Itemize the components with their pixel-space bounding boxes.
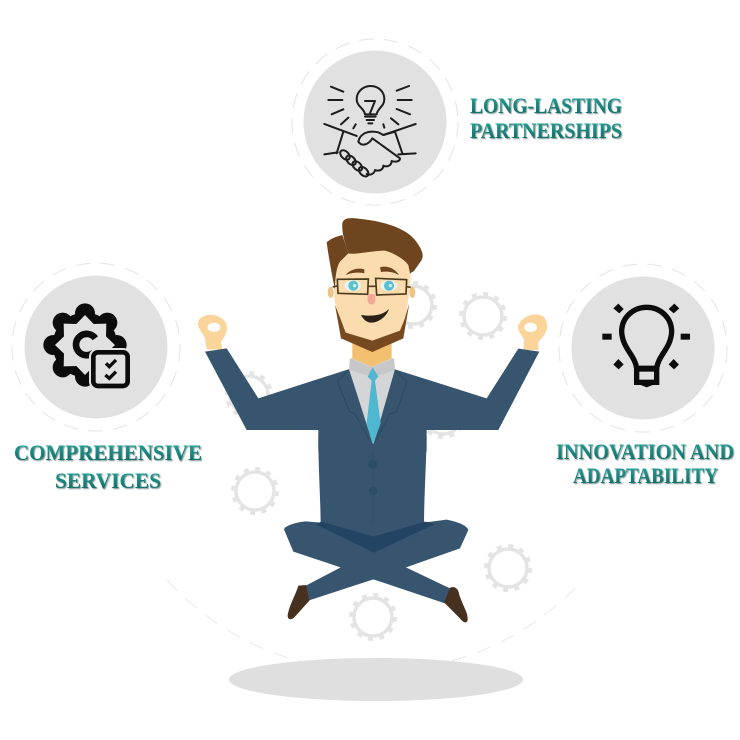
illustration: meditating businessman <box>198 218 547 622</box>
panel: comprehensive services <box>12 263 202 493</box>
heading: long-lasting partnerships <box>470 93 622 143</box>
large dashed orbit <box>167 580 583 672</box>
heading: comprehensive services <box>14 440 202 493</box>
icon: handshake with light bulb <box>324 86 416 178</box>
heading: long-lasting partnerships: PARTNERSHIPS <box>470 118 622 143</box>
floor shadow <box>229 658 523 701</box>
icon: gear with checklist <box>43 303 130 388</box>
heading: comprehensive services: COMPREHENSIVE <box>14 440 202 465</box>
lower body <box>284 437 468 622</box>
panel: long-lasting partnerships <box>292 39 622 205</box>
heading: innovation and adaptability: ADAPTABILITY <box>573 463 718 488</box>
heading: innovation and adaptability <box>556 439 734 488</box>
icon: light bulb <box>602 304 690 387</box>
panel: innovation and adaptability <box>556 264 734 488</box>
heading: long-lasting partnerships: LONG-LASTING <box>470 93 622 118</box>
heading: comprehensive services: SERVICES <box>55 468 161 493</box>
torso and arms <box>198 314 547 452</box>
head <box>327 218 423 352</box>
background gears <box>227 283 530 639</box>
